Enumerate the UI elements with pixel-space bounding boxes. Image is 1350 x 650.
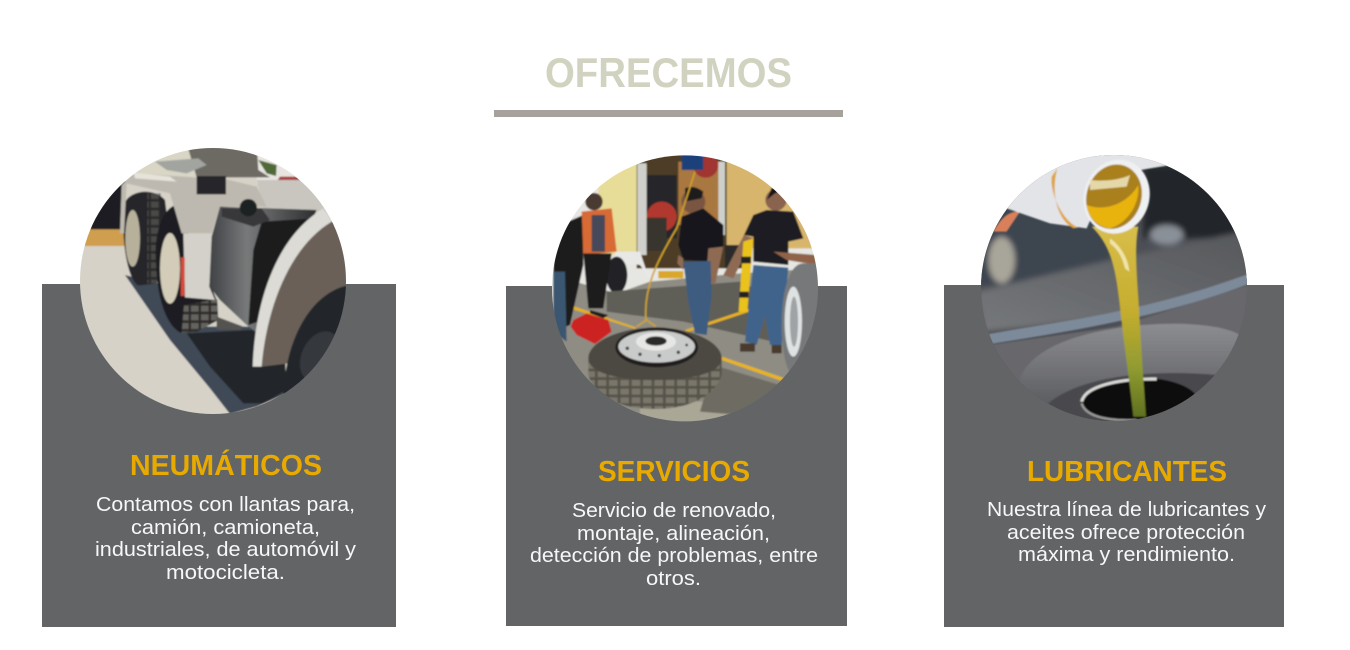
- tank: [209, 207, 317, 333]
- panel background: [506, 286, 847, 626]
- description: lubricantes: Nuestra línea de lubricantes y: [987, 499, 1266, 521]
- bottle: [1007, 155, 1167, 230]
- front tyre: [156, 205, 218, 333]
- right man: [765, 189, 787, 211]
- title underline: [494, 110, 843, 117]
- description: neumáticos: [95, 494, 356, 584]
- photo: oil pouring: [981, 155, 1247, 421]
- stream: [1092, 227, 1146, 417]
- yellow post: [739, 238, 753, 312]
- rear tyre: [123, 192, 170, 286]
- description: servicios: detección de problemas, entre: [530, 545, 818, 567]
- panel: lubricantes: [944, 145, 1284, 627]
- heading: neumáticos: NEUMÁTICOS: [130, 448, 322, 482]
- chassis: [120, 173, 267, 233]
- description: lubricantes: [987, 499, 1266, 566]
- red tank: [571, 313, 612, 344]
- heading: servicios: SERVICIOS: [598, 456, 750, 488]
- panel background: [42, 284, 396, 627]
- description: neumáticos: motocicleta.: [166, 562, 285, 584]
- description: lubricantes: máxima y rendimiento.: [1018, 544, 1235, 566]
- title: OFRECEMOS: [545, 49, 792, 96]
- description: servicios: montaje, alineación,: [577, 523, 770, 545]
- description: neumáticos: camión, camioneta,: [131, 517, 320, 539]
- photo: truck rear wheels: [80, 148, 346, 414]
- description: lubricantes: aceites ofrece protección: [1007, 522, 1245, 544]
- panel background: [944, 285, 1284, 627]
- panel: neumáticos: [42, 140, 396, 627]
- photo: technicians and tyre: [552, 155, 818, 422]
- main tyre: [588, 360, 722, 410]
- heading: lubricantes: LUBRICANTES: [1027, 456, 1227, 488]
- wheel right: [780, 262, 818, 371]
- description: servicios: Servicio de renovado,: [572, 500, 776, 522]
- panel: servicios: [506, 145, 847, 626]
- description: servicios: otros.: [646, 568, 701, 590]
- description: servicios: [530, 500, 818, 590]
- description: neumáticos: industriales, de automóvil y: [95, 539, 356, 561]
- centre man: [681, 190, 705, 214]
- shadow on ground: [125, 275, 287, 414]
- bottle mouth: [1084, 160, 1151, 235]
- left people: [553, 215, 583, 332]
- description: neumáticos: Contamos con llantas para,: [96, 494, 355, 516]
- ground: [561, 270, 793, 414]
- mudguard: [262, 221, 346, 368]
